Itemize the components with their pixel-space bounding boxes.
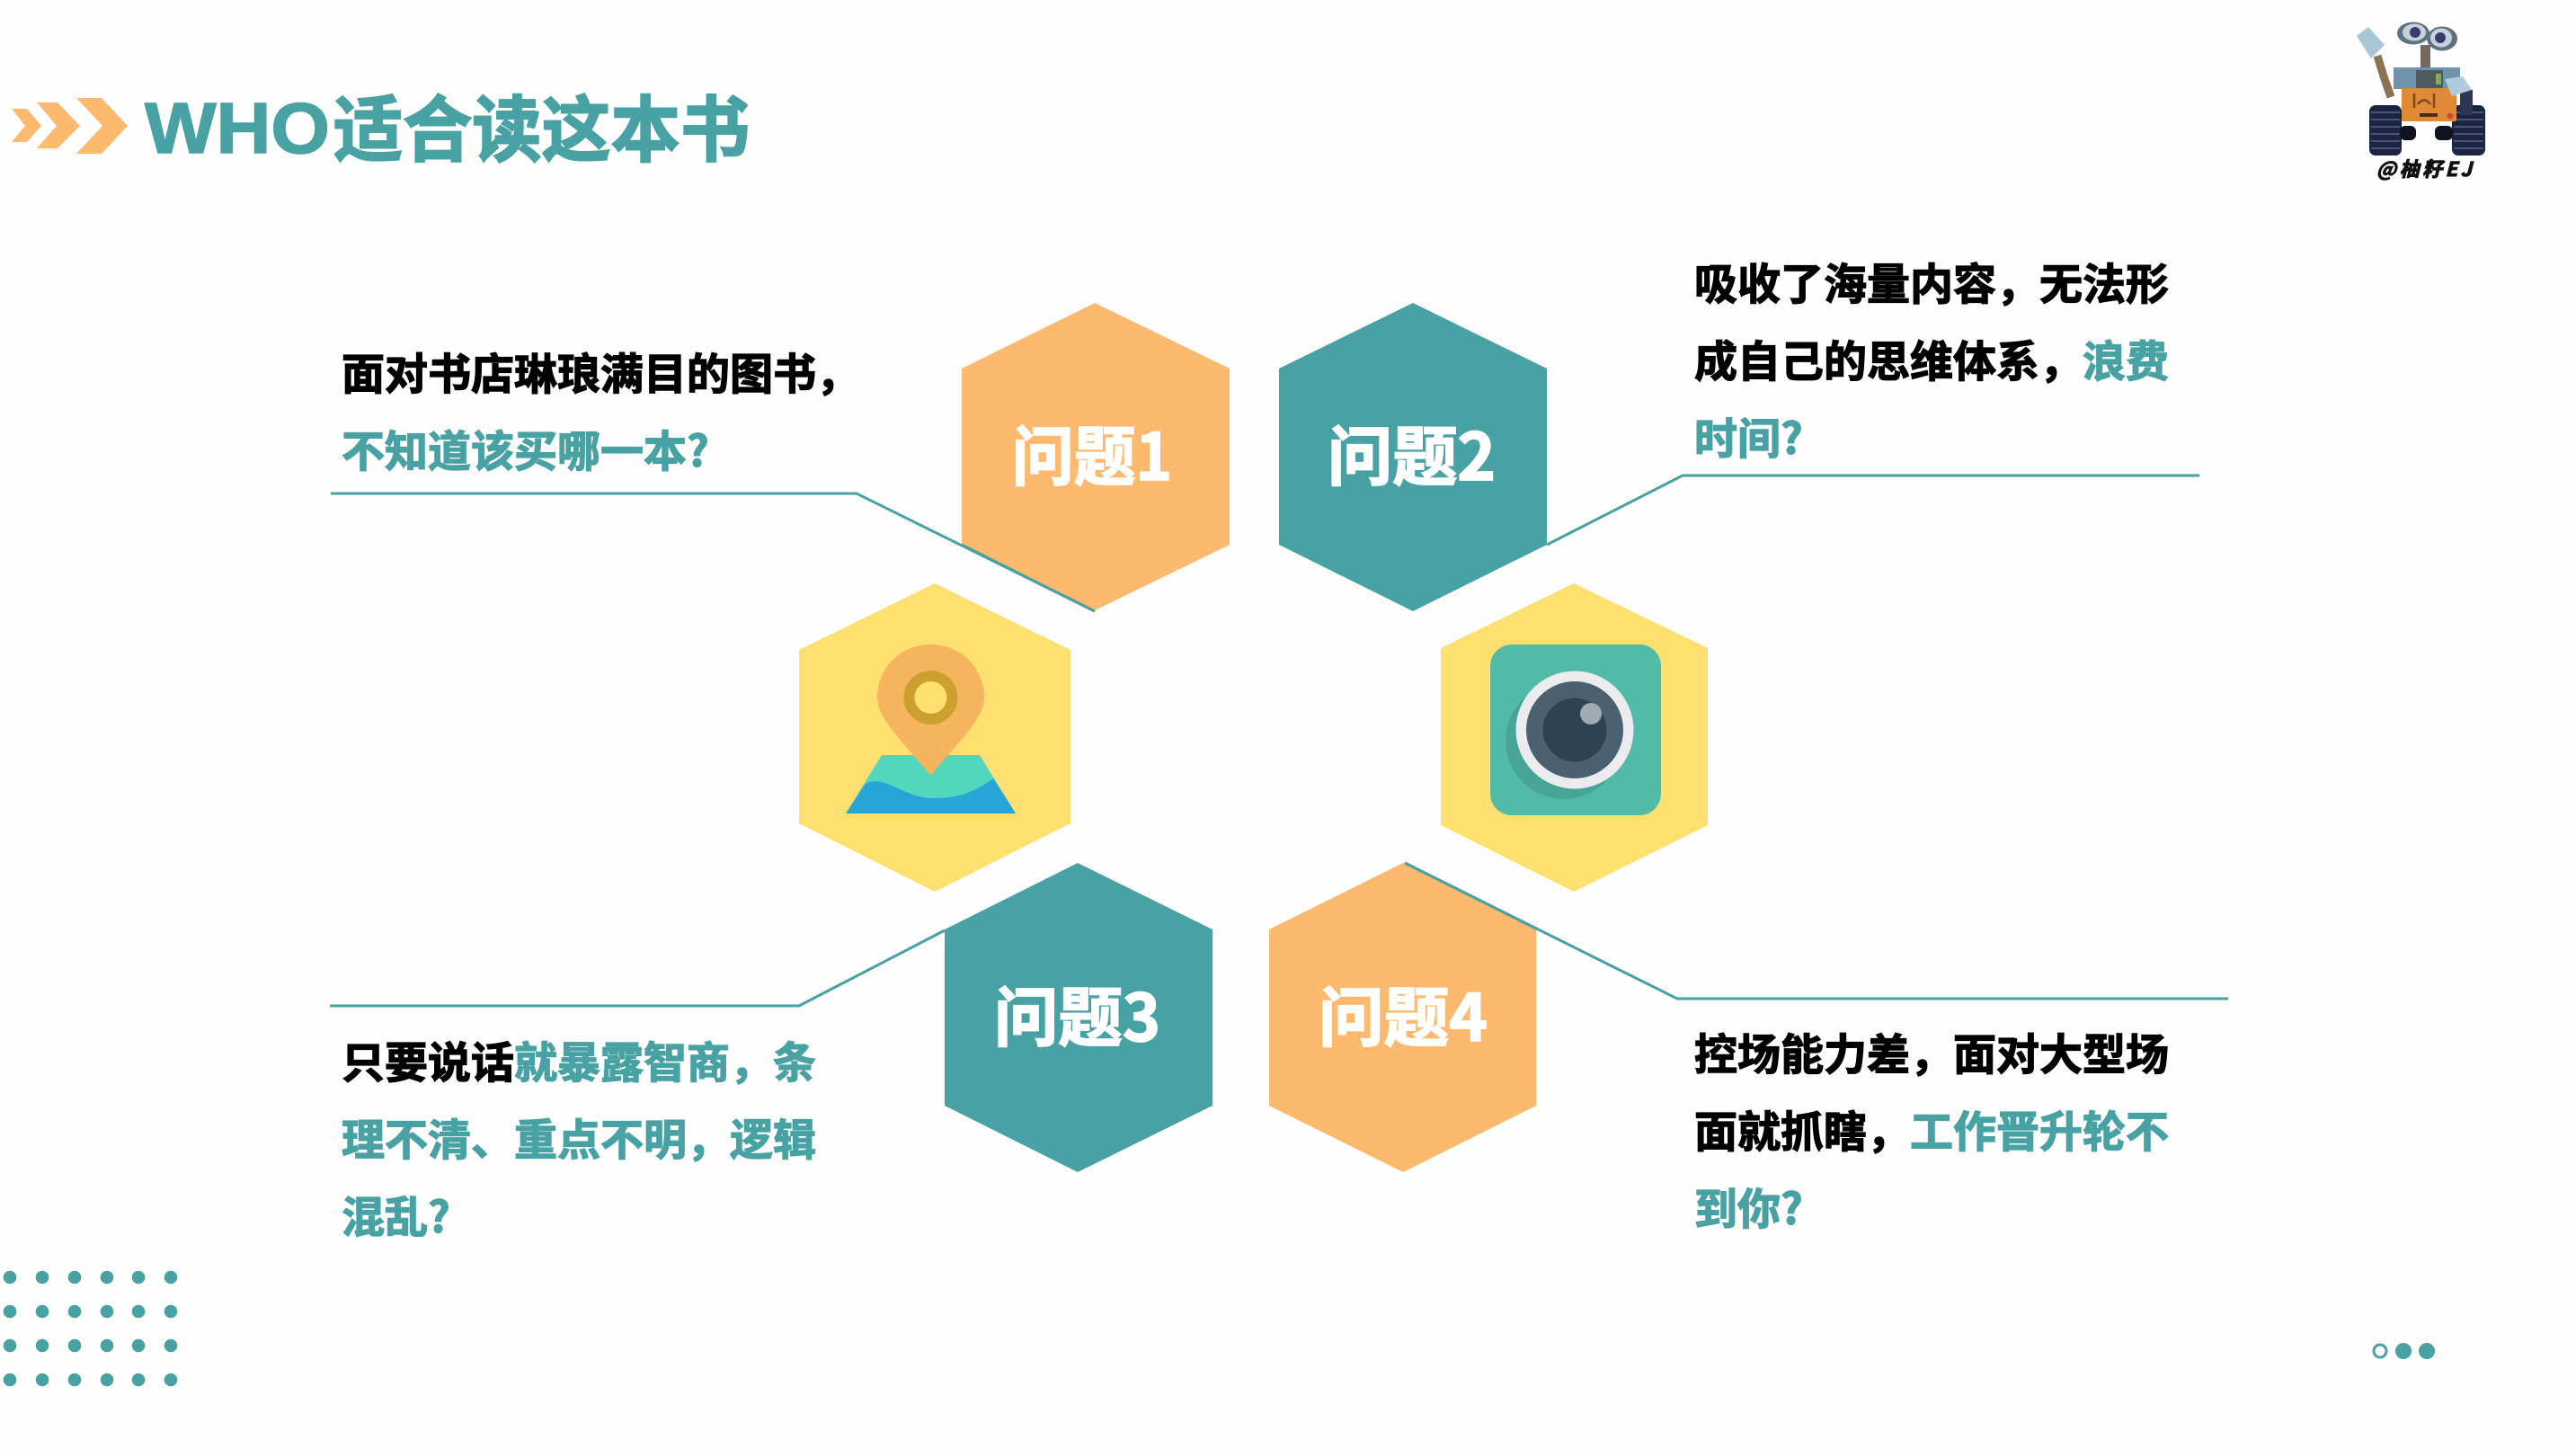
robot left hand	[2357, 27, 2385, 58]
robot neck	[2421, 45, 2430, 68]
text block: question 4	[1694, 1019, 2169, 1237]
question 1 label: 问题1	[1012, 404, 1172, 499]
hexagon: question 1	[962, 303, 1230, 610]
robot left eye	[2397, 22, 2429, 45]
title: WHO	[145, 88, 330, 168]
text block: question 4: 控场能力差，面对大型场	[1694, 1019, 2169, 1082]
text block: question 3: 混乱?	[342, 1182, 450, 1245]
title: 适合读这本书	[333, 73, 750, 177]
text block: question 4: 面就抓瞎，工作晋升轮不	[1694, 1097, 2169, 1160]
hexagon: question 2	[1279, 303, 1547, 611]
text block: question 3	[342, 1027, 816, 1245]
text block: question 2: 吸收了海量内容，无法形	[1694, 249, 2169, 312]
robot left arm	[2377, 56, 2391, 97]
text block: question 2: 成自己的思维体系，浪费	[1694, 326, 2169, 389]
question 4 label: 问题4	[1319, 965, 1488, 1060]
connector line: issue 4	[1405, 863, 2228, 999]
hexagon: map pin icon	[799, 583, 1070, 892]
pagination dots	[2374, 1343, 2435, 1359]
text block: question 1	[342, 339, 859, 479]
connector line: issue 3	[330, 930, 945, 1006]
text block: question 1: 面对书店琳琅满目的图书，	[342, 339, 859, 402]
connector overlay: issue 4 edge	[1405, 863, 1536, 929]
question 3 label: 问题3	[994, 965, 1160, 1060]
connector line: issue 1	[331, 493, 1095, 611]
connector overlay: issue 1 edge	[962, 545, 1095, 611]
robot right eye	[2427, 27, 2457, 50]
robot wheels	[2369, 105, 2485, 156]
text block: question 1: 不知道该买哪一本?	[342, 416, 709, 479]
icon: robot mascot with watermark	[2357, 22, 2485, 182]
title	[145, 73, 750, 177]
question 2 label: 问题2	[1328, 404, 1496, 499]
watermark: @柚籽EJ	[2376, 154, 2474, 182]
hexagon: question 3	[945, 863, 1212, 1172]
icon: map	[846, 755, 1016, 813]
text block: question 3: 只要说话就暴露智商，条	[342, 1027, 816, 1090]
robot orange body	[2402, 88, 2456, 121]
text block: question 2	[1694, 249, 2169, 467]
text block: question 4: 到你?	[1694, 1174, 1803, 1237]
dot grid decoration	[4, 1271, 177, 1386]
robot wheel treads	[2371, 112, 2483, 148]
text block: question 3: 理不清、重点不明，逻辑	[342, 1105, 816, 1168]
hexagon: camera icon	[1441, 583, 1708, 892]
hexagon: question 4	[1269, 863, 1536, 1172]
robot upper body	[2394, 67, 2460, 89]
icon: location pin	[877, 644, 984, 776]
icon: title chevrons	[12, 98, 128, 154]
icon: camera	[1490, 644, 1661, 815]
connector line: issue 2	[1547, 476, 2199, 545]
text block: question 2: 时间?	[1694, 404, 1803, 467]
robot right hand	[2445, 76, 2473, 115]
